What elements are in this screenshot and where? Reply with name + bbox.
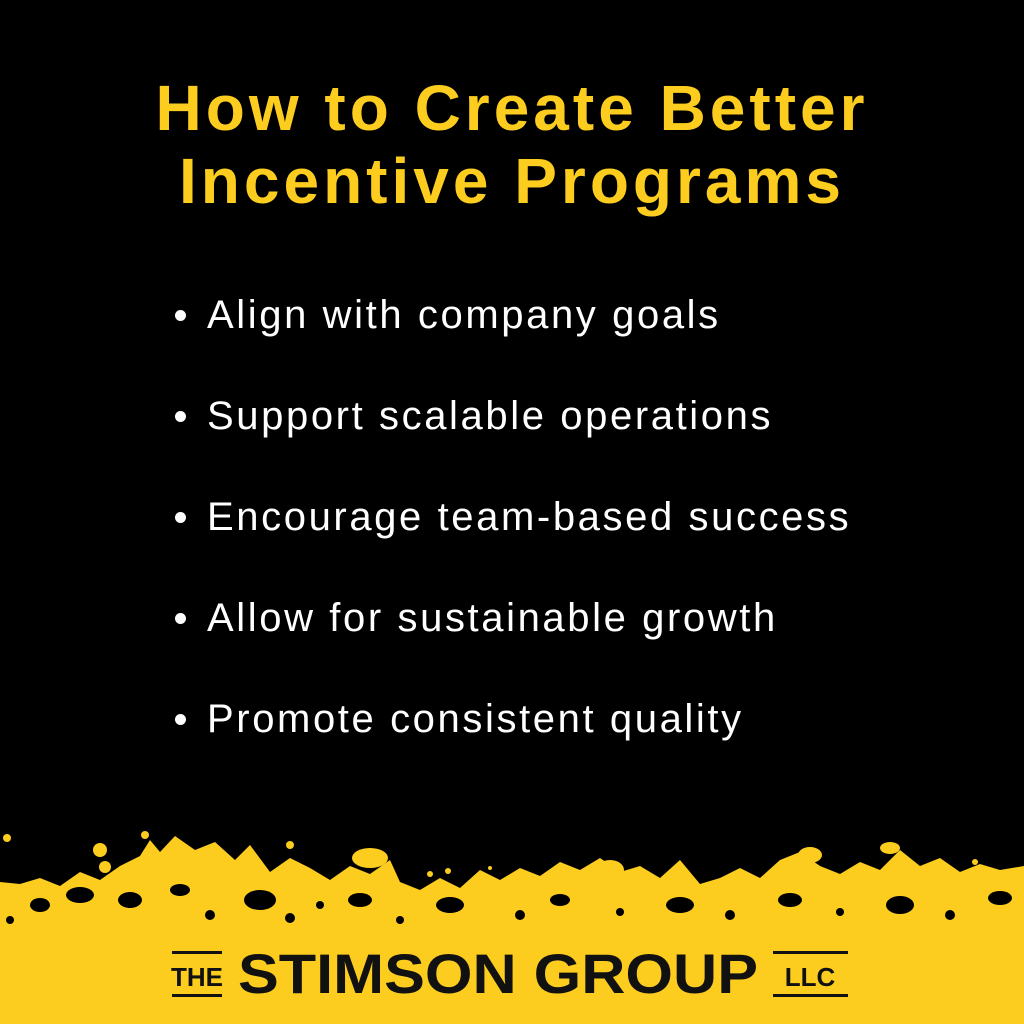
bullet 4: Allow for sustainable growth <box>207 596 778 640</box>
title <box>156 72 868 217</box>
bullet 5: Promote consistent quality <box>207 697 744 741</box>
bullet 1: Align with company goals <box>207 293 721 337</box>
title: How to Create Better <box>156 72 868 144</box>
bullet 3: Encourage team-based success <box>207 495 851 539</box>
title: Incentive Programs <box>179 145 845 217</box>
logo: The Stimson Group LLC: LLC <box>785 962 835 992</box>
bullet 2: Support scalable operations <box>207 394 773 438</box>
logo: The Stimson Group LLC: THE <box>171 962 223 992</box>
logo: The Stimson Group LLC: STIMSON GROUP <box>238 942 758 1005</box>
bullet list <box>175 293 851 741</box>
yellow splatter band <box>0 831 1024 1024</box>
